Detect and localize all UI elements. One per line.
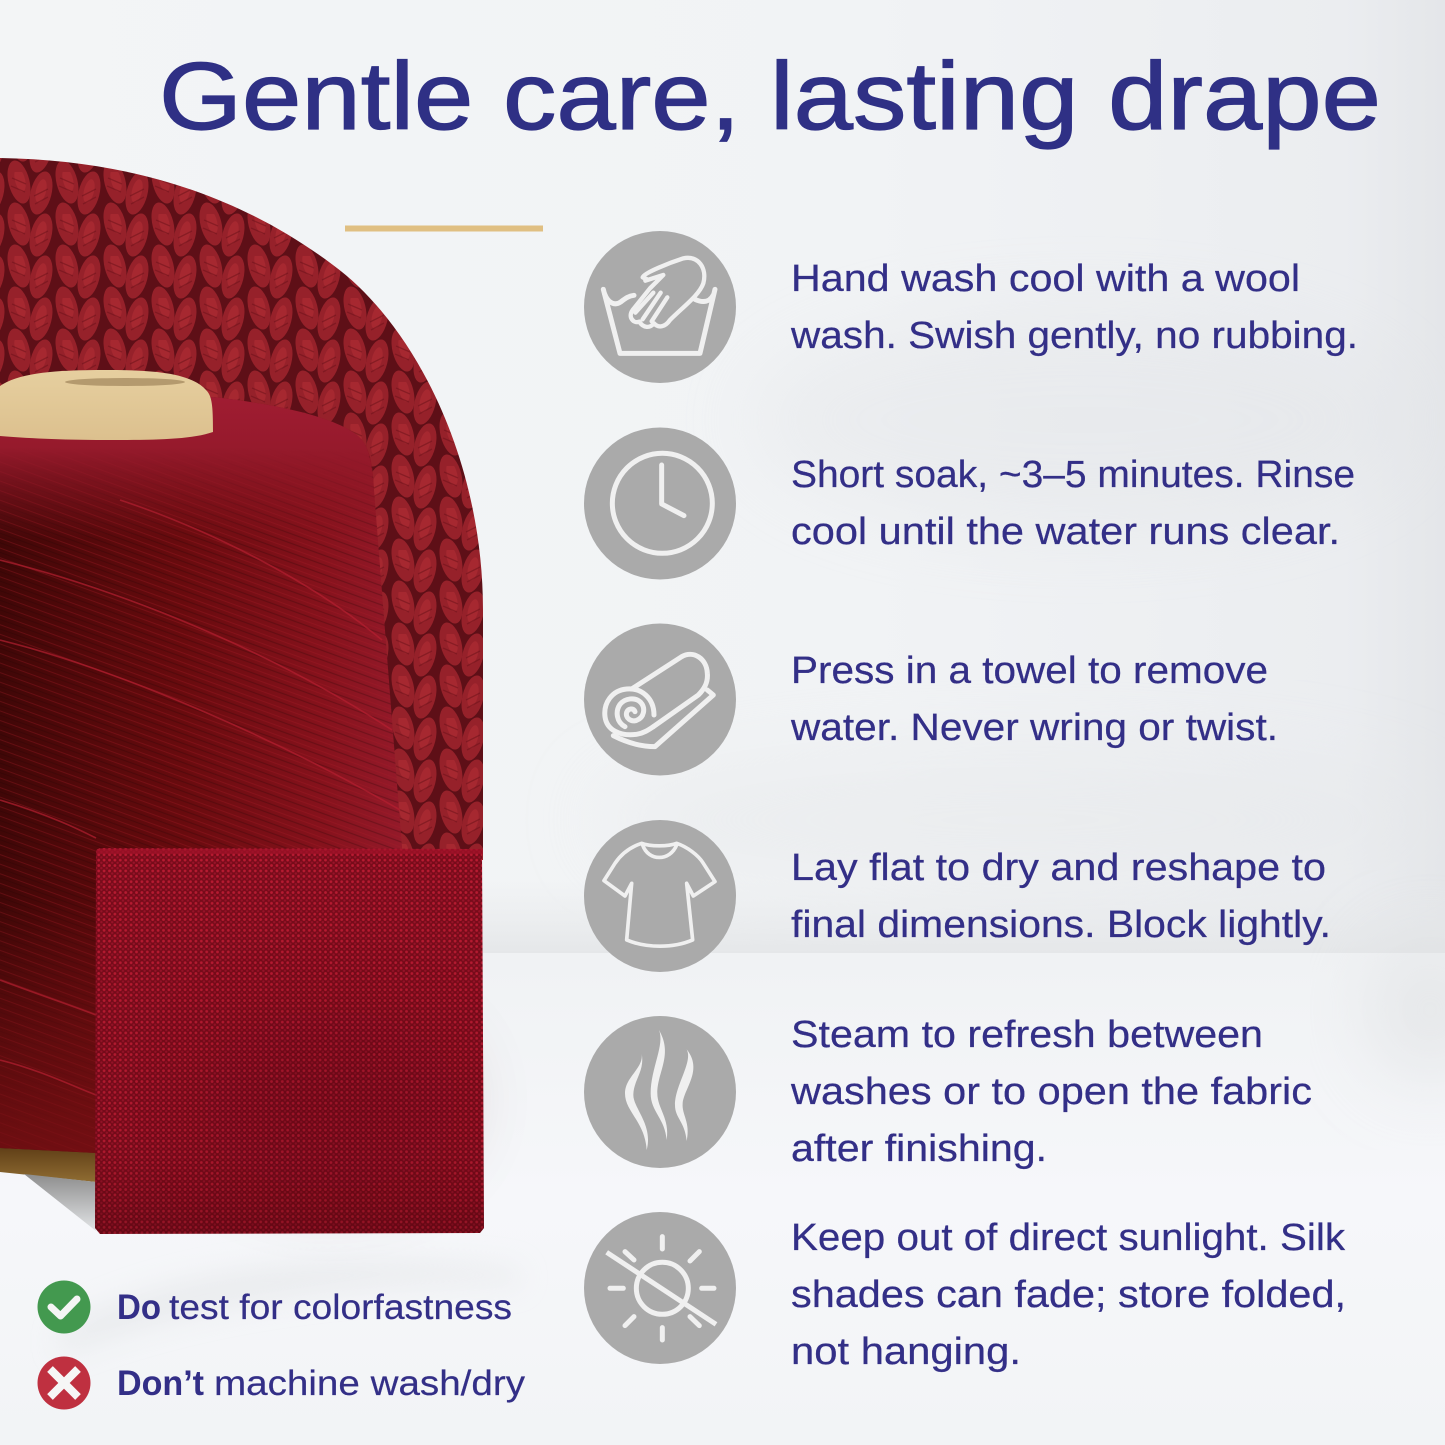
text: short soak xyxy=(791,454,1355,553)
don't callout xyxy=(38,1356,526,1410)
title: Gentle care, lasting drape xyxy=(159,43,1381,150)
do callout xyxy=(38,1280,512,1334)
do callout: Do xyxy=(117,1288,161,1327)
text: hand wash xyxy=(790,258,1358,357)
text: no sun: shades can fade; store folded, xyxy=(791,1274,1346,1316)
icon: crossed-out sun xyxy=(607,1237,716,1340)
icon: cross mark xyxy=(50,1369,78,1397)
icon: t-shirt xyxy=(604,843,715,946)
text: steam xyxy=(790,1014,1312,1170)
text: short soak: cool until the water runs clear. xyxy=(791,511,1340,553)
text: lay flat: final dimensions. Block lightly. xyxy=(791,904,1331,946)
gold accent rule xyxy=(345,226,543,232)
cardboard tube xyxy=(0,370,213,440)
text: no sun xyxy=(791,1217,1346,1373)
care step: lay flat xyxy=(584,820,1331,972)
woven swatch xyxy=(95,848,484,1234)
don't callout: machine wash/dry xyxy=(214,1364,526,1403)
text: towel press xyxy=(790,650,1278,749)
text: no sun: not hanging. xyxy=(791,1331,1021,1373)
care step: short soak xyxy=(584,428,1355,580)
icon: check mark xyxy=(51,1299,77,1316)
icon: hand wash basin xyxy=(603,258,715,353)
text: no sun: Keep out of direct sunlight. Silk xyxy=(791,1217,1346,1259)
text: short soak: Short soak, ~3–5 minutes. Rinse xyxy=(791,454,1355,496)
icon: steam xyxy=(625,1030,693,1150)
text: lay flat: Lay flat to dry and reshape to xyxy=(791,847,1326,889)
text: lay flat xyxy=(791,847,1331,946)
knit backdrop xyxy=(0,150,490,870)
care step: steam xyxy=(584,1014,1312,1170)
do callout: test for colorfastness xyxy=(169,1288,512,1327)
care step: hand wash xyxy=(584,231,1358,383)
don't callout: Don’t xyxy=(117,1364,204,1403)
text: steam: after finishing. xyxy=(791,1128,1047,1170)
care step: towel press xyxy=(584,624,1278,776)
icon: rolled towel xyxy=(605,654,713,747)
icon: clock xyxy=(612,453,712,553)
text: hand wash: Hand wash cool with a wool xyxy=(791,258,1300,300)
yarn cone xyxy=(0,397,403,1231)
text: towel press: Press in a towel to remove xyxy=(791,650,1268,692)
text: hand wash: wash. Swish gently, no rubbing. xyxy=(790,315,1358,357)
product photo: knit, yarn cone and woven swatch xyxy=(0,150,490,1234)
care step: no sun xyxy=(584,1212,1346,1373)
text: steam: washes or to open the fabric xyxy=(790,1071,1312,1113)
text: towel press: water. Never wring or twist. xyxy=(790,707,1278,749)
text: steam: Steam to refresh between xyxy=(791,1014,1263,1056)
